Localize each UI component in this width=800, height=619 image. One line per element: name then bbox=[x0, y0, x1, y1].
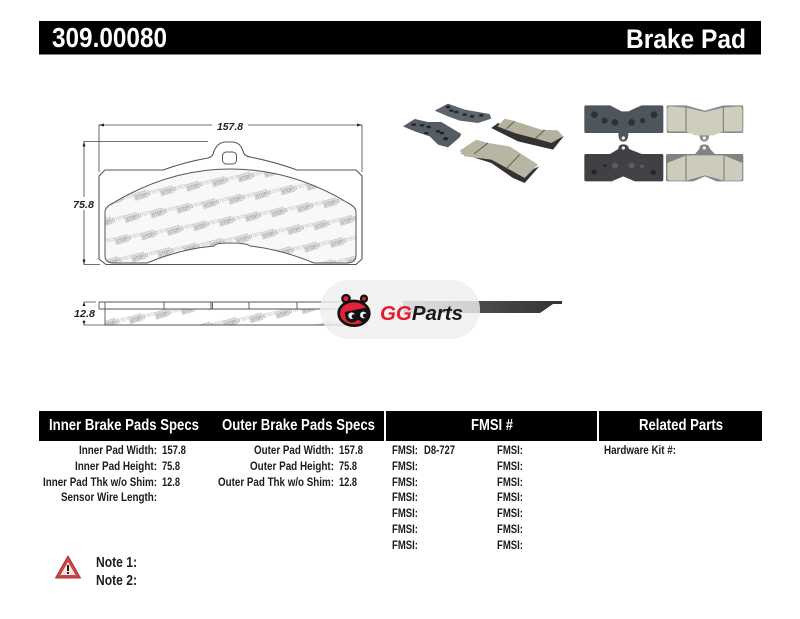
header: inner and outer specs: Outer Brake Pads Specs bbox=[222, 417, 375, 434]
photo: angled pad set bbox=[403, 104, 564, 183]
inner pad specs: Inner Pad Height: bbox=[75, 459, 157, 473]
outer pad specs: Outer Pad Width: bbox=[254, 443, 334, 457]
part number: 309.00080 bbox=[52, 22, 167, 53]
header: FMSI: FMSI # bbox=[471, 417, 513, 434]
dark pad front bbox=[403, 119, 461, 147]
notes bbox=[96, 555, 137, 589]
FMSI numbers: FMSI: bbox=[497, 490, 523, 504]
FMSI numbers: FMSI: bbox=[392, 443, 418, 457]
dark pad rear bbox=[435, 104, 491, 123]
header: FMSI bbox=[386, 411, 597, 441]
outer pad specs: Outer Pad Thk w/o Shim: bbox=[218, 475, 334, 489]
inner pad specs: 157.8 bbox=[162, 443, 186, 457]
logo wordmark: GGParts bbox=[380, 303, 463, 325]
FMSI numbers: FMSI: bbox=[392, 490, 418, 504]
spec table headers bbox=[39, 411, 762, 441]
friction view bottom bbox=[666, 144, 743, 181]
inner pad specs bbox=[43, 443, 186, 504]
friction view top bbox=[667, 105, 743, 142]
outer pad specs: 157.8 bbox=[339, 443, 363, 457]
width dimension: 157.8 bbox=[217, 121, 243, 133]
outer pad specs: Outer Pad Height: bbox=[250, 459, 334, 473]
outer pad specs: 75.8 bbox=[339, 459, 357, 473]
friction pad rear bbox=[491, 119, 564, 150]
inner pad specs: Inner Pad Width: bbox=[79, 443, 157, 457]
thickness dimension: 12.8 bbox=[74, 308, 95, 320]
back view top bbox=[584, 105, 663, 142]
width dimension bbox=[99, 121, 362, 172]
notes: Note 1: bbox=[96, 555, 137, 571]
related parts list: Hardware Kit #: bbox=[604, 443, 676, 457]
inner pad specs: Sensor Wire Length: bbox=[61, 490, 157, 504]
notes: Note 2: bbox=[96, 573, 137, 589]
backing plate edge photo bbox=[403, 301, 562, 313]
FMSI numbers: FMSI: bbox=[497, 443, 523, 457]
FMSI numbers: FMSI: bbox=[392, 475, 418, 489]
GGParts watermark logo bbox=[320, 280, 480, 339]
header: related parts: Related Parts bbox=[639, 417, 723, 434]
side profile of pad bbox=[99, 302, 345, 325]
FMSI numbers: FMSI: bbox=[497, 538, 523, 552]
mascot icon bbox=[339, 295, 369, 326]
outer pad specs: 12.8 bbox=[339, 475, 357, 489]
header: inner and outer specs: Inner Brake Pads Specs bbox=[49, 417, 199, 434]
header: related parts bbox=[599, 411, 762, 441]
back view bottom bbox=[584, 144, 663, 181]
mounting hole bbox=[222, 152, 236, 164]
inner pad specs: 12.8 bbox=[162, 475, 180, 489]
friction pad front bbox=[460, 140, 539, 183]
FMSI numbers bbox=[392, 443, 523, 552]
FMSI numbers: FMSI: bbox=[392, 522, 418, 536]
FMSI numbers: FMSI: bbox=[497, 506, 523, 520]
FMSI numbers: FMSI: bbox=[392, 459, 418, 473]
FMSI numbers: FMSI: bbox=[497, 475, 523, 489]
FMSI numbers: FMSI: bbox=[497, 522, 523, 536]
technical drawing: front view bbox=[73, 121, 362, 265]
logo pill bbox=[320, 280, 480, 339]
FMSI numbers: D8-727 bbox=[424, 443, 455, 457]
header bar bbox=[39, 21, 761, 54]
FMSI numbers: FMSI: bbox=[392, 506, 418, 520]
height dimension bbox=[73, 142, 208, 264]
backing plate outline bbox=[99, 142, 362, 264]
inner pad specs: Inner Pad Thk w/o Shim: bbox=[43, 475, 157, 489]
thickness dimension bbox=[74, 302, 105, 325]
friction material with watermark bbox=[100, 165, 362, 265]
product type: Brake Pad bbox=[626, 24, 746, 54]
technical drawing: side view bbox=[74, 301, 562, 325]
inner pad specs: 75.8 bbox=[162, 459, 180, 473]
FMSI numbers: FMSI: bbox=[497, 459, 523, 473]
FMSI numbers: FMSI: bbox=[392, 538, 418, 552]
icon: warning triangle bbox=[56, 556, 80, 578]
photo: flat pad views bbox=[584, 105, 743, 181]
outer pad specs bbox=[218, 443, 363, 489]
height dimension: 75.8 bbox=[73, 199, 94, 211]
header: inner and outer specs bbox=[39, 411, 384, 441]
